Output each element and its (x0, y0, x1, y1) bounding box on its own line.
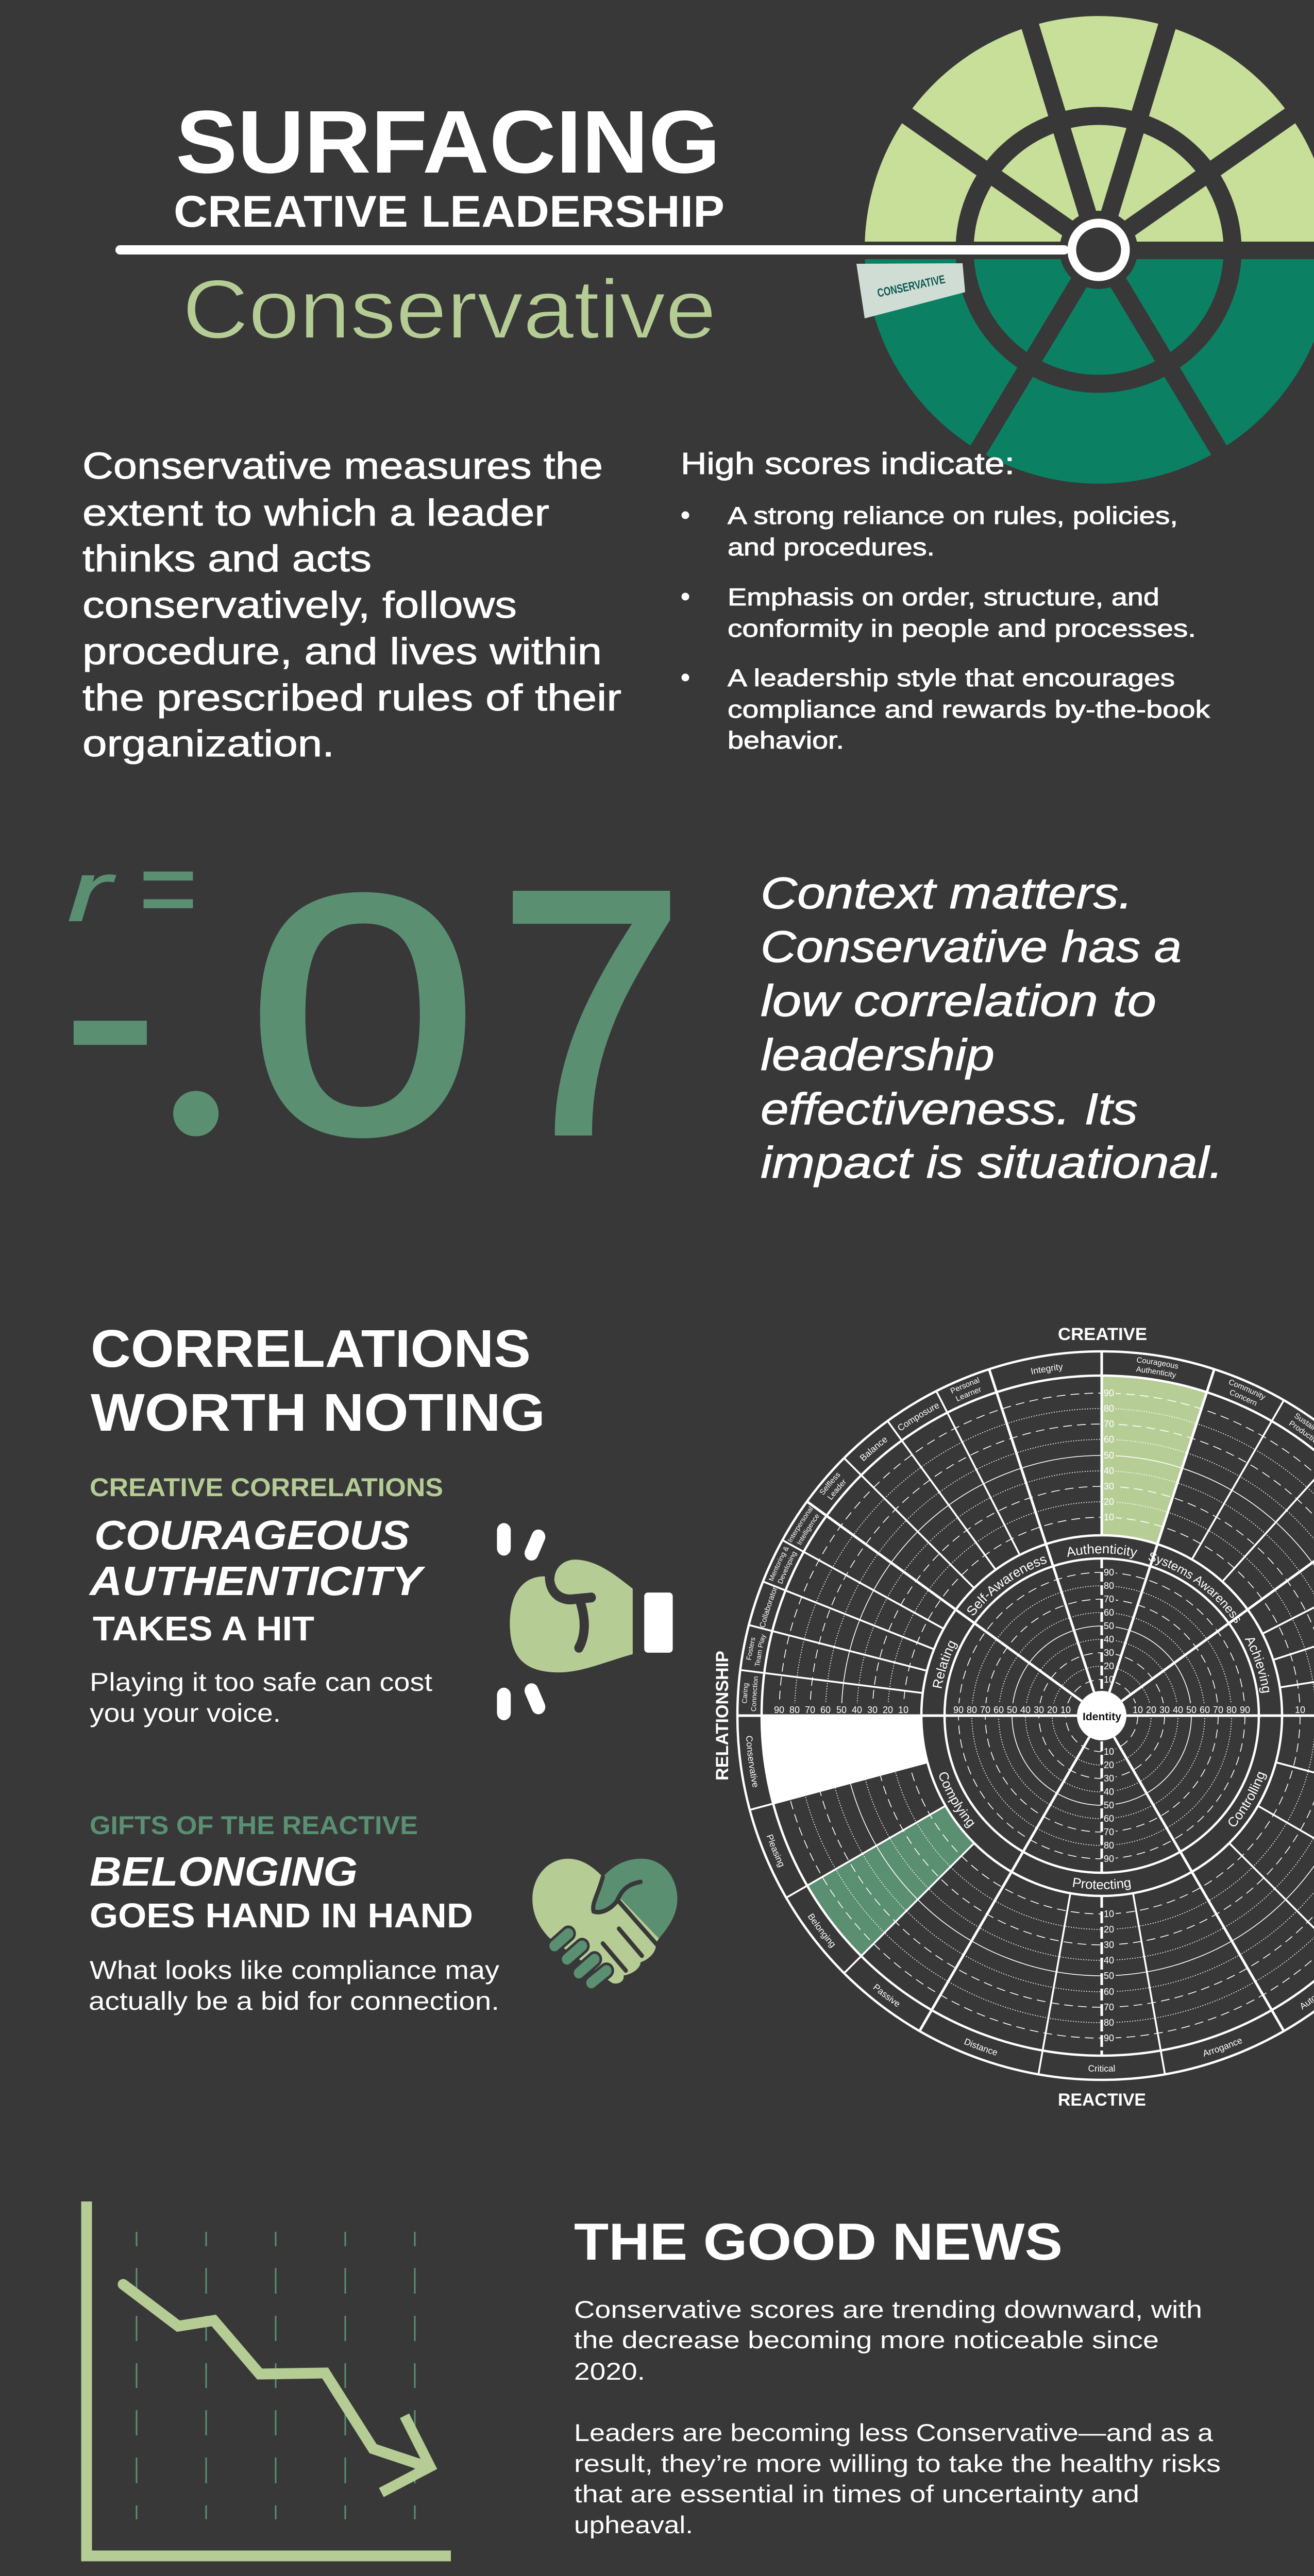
middle band labels: Self-Awareness (967, 1557, 1047, 1616)
vertical score tick labels (1104, 1388, 1114, 2043)
outer band dimension labels: Concern (1228, 1388, 1258, 1408)
horizontal score tick labels: 70 (1213, 1705, 1223, 1715)
heading: correlations worth noting: CORRELATIONS (91, 1319, 531, 1378)
big stat: r = -.07: - (60, 836, 160, 1181)
context matters statement: impact is situational. (761, 1138, 1223, 1188)
outer band dimension labels: Composure (898, 1403, 939, 1430)
subtitle: Conservative: Conservative (182, 263, 716, 356)
horizontal score tick labels: 60 (1200, 1705, 1210, 1715)
title divider line (115, 245, 1069, 255)
score rings (762, 1376, 1314, 2056)
high scores list: A leadership style that encourages (728, 664, 1175, 691)
text block: creative correlations: COURAGEOUS (94, 1512, 410, 1558)
high scores list: and procedures. (728, 533, 935, 561)
outer band dimension labels: Connection (750, 1676, 760, 1711)
horizontal score tick labels: 10 (1295, 1705, 1305, 1715)
outer band dimension labels (740, 1355, 1314, 2074)
text block: creative correlations: AUTHENTICITY (89, 1558, 426, 1604)
quadrant labels: REACTIVE (1058, 2090, 1146, 2110)
outer band dimension labels: Team Play (753, 1633, 767, 1667)
definition paragraph: procedure, and lives within (82, 631, 602, 672)
horizontal score tick labels: 80 (1226, 1705, 1237, 1715)
middle band labels: Authenticity (1067, 1544, 1138, 1559)
text block: the good news: Conservative scores are trending downward, with (574, 2296, 1202, 2323)
outer band dimension labels: Community (1227, 1378, 1267, 1402)
spokes (737, 1351, 1314, 2074)
middle band labels: Relating (933, 1640, 958, 1688)
vertical score tick labels: 80 (1104, 2018, 1114, 2028)
text block: creative correlations: you your voice. (90, 1699, 281, 1727)
outer band dimension labels: Developing (776, 1550, 798, 1585)
text block: the good news: result, they’re more willing to take the healthy risks (574, 2450, 1221, 2477)
chart: leadership circle wheel (713, 1325, 1314, 2110)
outer band dimension labels: Personal (950, 1377, 980, 1394)
hub: identity (1077, 1691, 1126, 1740)
vertical score tick labels: 80 (1104, 1840, 1114, 1851)
high scores list: behavior. (728, 726, 844, 754)
middle band labels: Systems Awareness (1149, 1553, 1240, 1623)
text block: gifts of the reactive: What looks like compliance may (90, 1956, 499, 1985)
big stat: r = -.07: . (148, 789, 244, 1214)
vertical score tick labels: 20 (1104, 1497, 1114, 1507)
text block: the good news: upheaval. (574, 2511, 693, 2538)
text block: gifts of the reactive: GOES HAND IN HAND (90, 1896, 473, 1935)
definition paragraph: the prescribed rules of their (82, 677, 621, 719)
horizontal score tick labels: 20 (1146, 1705, 1156, 1715)
outer band dimension labels: Learner (955, 1387, 981, 1401)
outer band dimension labels: Arrogance (1204, 2039, 1242, 2057)
structure rings (737, 1351, 1314, 2080)
horizontal score tick labels: 10 (1133, 1705, 1143, 1715)
text block: creative correlations (89, 1473, 443, 1727)
horizontal score tick labels: 30 (1034, 1705, 1044, 1715)
definition paragraph: organization. (82, 723, 334, 765)
horizontal score tick labels: 90 (1240, 1705, 1250, 1715)
definition paragraph: Conservative measures the (82, 446, 603, 487)
middle band labels: Protecting (1073, 1877, 1131, 1890)
heading: correlations worth noting (91, 1319, 545, 1442)
definition paragraph (82, 446, 621, 765)
title: CREATIVE LEADERSHIP (174, 187, 725, 236)
vertical score tick labels: 50 (1104, 1800, 1114, 1810)
highlighted wedge: belonging (807, 1806, 974, 1956)
horizontal score tick labels: 40 (1020, 1705, 1031, 1715)
outer band dimension labels: Integrity (1031, 1364, 1063, 1375)
high scores list: A strong reliance on rules, policies, (728, 502, 1178, 529)
context matters statement: leadership (761, 1030, 995, 1080)
middle band labels: Complying (939, 1772, 975, 1828)
vertical score tick labels: 60 (1104, 1814, 1114, 1824)
context matters statement (761, 869, 1223, 1188)
high scores list (681, 447, 1210, 754)
big stat: r = -.07 (60, 789, 683, 1214)
context matters statement: Conservative has a (761, 922, 1182, 972)
vertical score tick labels: 30 (1104, 1648, 1114, 1658)
horizontal score tick labels: 70 (980, 1705, 990, 1715)
highlighted wedge: conservative (762, 1716, 928, 1804)
outer band dimension labels: Pleasing (767, 1834, 784, 1867)
vertical score tick labels: 90 (1104, 1388, 1114, 1398)
vertical score tick labels: 40 (1104, 1634, 1114, 1645)
text block: the good news: Leaders are becoming less Conservative—and as a (574, 2419, 1214, 2446)
vertical score tick labels: 90 (1104, 1854, 1114, 1864)
vertical score tick labels: 40 (1104, 1787, 1114, 1797)
big stat: r = -.07: 0 (248, 826, 477, 1203)
big stat: r = -.07: 7 (499, 820, 683, 1206)
middle band labels (929, 1541, 1275, 1892)
quadrant labels (713, 1325, 1147, 2110)
vertical score tick labels: 10 (1104, 1747, 1114, 1757)
outer band dimension labels: Courageous (1136, 1355, 1180, 1371)
horizontal score tick labels: 20 (883, 1705, 893, 1715)
high scores list: compliance and rewards by-the-book (728, 696, 1210, 723)
text block: the good news: that are essential in times of uncertainty and (574, 2480, 1139, 2507)
horizontal score tick labels: 10 (898, 1705, 908, 1715)
outer band dimension labels: Selfless (820, 1472, 840, 1495)
vertical score tick labels: 60 (1104, 1607, 1114, 1618)
vertical score tick labels: 20 (1104, 1760, 1114, 1770)
vertical score tick labels: 70 (1104, 1419, 1114, 1429)
vertical score tick labels: 30 (1104, 1773, 1114, 1784)
horizontal score tick labels: 30 (867, 1705, 878, 1715)
icon: conservative tag on wheel (856, 263, 965, 318)
vertical score tick labels: 70 (1104, 1594, 1114, 1604)
vertical score tick labels: 70 (1104, 2002, 1114, 2012)
vertical score tick labels: 10 (1104, 1674, 1114, 1685)
vertical score tick labels: 40 (1104, 1955, 1114, 1965)
text block: creative correlations: TAKES A HIT (93, 1609, 314, 1648)
high scores list: Emphasis on order, structure, and (728, 583, 1159, 611)
vertical score tick labels: 50 (1104, 1971, 1114, 1981)
vertical score tick labels: 90 (1104, 2033, 1114, 2043)
text block: gifts of the reactive (89, 1811, 499, 2015)
quadrant labels: RELATIONSHIP (713, 1651, 732, 1781)
text block: gifts of the reactive: actually be a bid for connection. (89, 1987, 499, 2015)
outer band dimension labels: Authenticity (1136, 1365, 1177, 1380)
title (174, 92, 725, 236)
horizontal score tick labels: 50 (1007, 1705, 1017, 1715)
vertical score tick labels: 10 (1104, 1909, 1114, 1919)
icon: heart handshake (532, 1859, 677, 1984)
outer band dimension labels: Collaborator (760, 1587, 777, 1627)
high scores list: conformity in people and processes. (728, 615, 1196, 642)
definition paragraph: extent to which a leader (82, 493, 549, 534)
title: SURFACING (176, 92, 720, 192)
big stat: r = -.07: r (68, 844, 116, 939)
vertical score tick labels: 10 (1104, 1512, 1114, 1522)
icon: conservative tag on wheel: CONSERVATIVE (876, 272, 947, 300)
vertical score tick labels: 30 (1104, 1940, 1114, 1950)
middle band labels: Achieving (1245, 1638, 1270, 1693)
horizontal score tick labels: 40 (852, 1705, 862, 1715)
horizontal score tick labels: 10 (1060, 1705, 1071, 1715)
vertical score tick labels: 50 (1104, 1450, 1114, 1461)
heading: correlations worth noting: WORTH NOTING (91, 1383, 545, 1442)
vertical score tick labels: 40 (1104, 1466, 1114, 1476)
chart: downward trend (87, 2201, 451, 2556)
outer band dimension labels: Conservative (746, 1736, 757, 1787)
text block: the good news: THE GOOD NEWS (574, 2213, 1063, 2271)
text block: gifts of the reactive: BELONGING (90, 1849, 358, 1894)
outer band dimension labels: Fosters (745, 1636, 757, 1661)
vertical score tick labels: 30 (1104, 1481, 1114, 1492)
horizontal score tick labels (774, 1705, 1305, 1715)
vertical score tick labels: 20 (1104, 1924, 1114, 1935)
outer band dimension labels: Mentoring & (767, 1545, 790, 1582)
high scores list: High scores indicate: (681, 447, 1015, 481)
horizontal score tick labels: 60 (993, 1705, 1004, 1715)
vertical score tick labels: 70 (1104, 1827, 1114, 1837)
outer band dimension labels: Caring (740, 1683, 750, 1704)
icon: boxing glove (504, 1531, 673, 1713)
vertical score tick labels: 80 (1104, 1581, 1114, 1591)
text block: the good news: the decrease becoming more noticeable since (574, 2326, 1159, 2353)
vertical score tick labels: 60 (1104, 1987, 1114, 1997)
horizontal score tick labels: 80 (967, 1705, 977, 1715)
outer band dimension labels: Distance (964, 2038, 997, 2056)
context matters statement: low correlation to (761, 976, 1156, 1026)
outer band dimension labels: Intelligence (797, 1515, 819, 1545)
text block: gifts of the reactive: GIFTS OF THE REACTIVE (90, 1811, 418, 1840)
icon: header wheel logo (856, 16, 1314, 484)
context matters statement: Context matters. (761, 869, 1133, 918)
horizontal score tick labels: 60 (820, 1705, 831, 1715)
highlighted wedge: courageous authenticity (1102, 1376, 1207, 1544)
big stat: r = -.07: = (139, 827, 197, 950)
vertical score tick labels: 50 (1104, 1621, 1114, 1631)
text block: the good news (574, 2213, 1221, 2538)
text block: the good news: 2020. (574, 2358, 645, 2385)
quadrant labels: CREATIVE (1058, 1325, 1147, 1344)
text block: creative correlations: Playing it too safe can cost (90, 1668, 432, 1697)
horizontal score tick labels: 90 (774, 1705, 784, 1715)
horizontal score tick labels: 30 (1159, 1705, 1170, 1715)
outer band dimension labels: Belonging (808, 1913, 835, 1948)
horizontal score tick labels: 50 (836, 1705, 847, 1715)
outer band dimension labels: Interpersonal (787, 1506, 813, 1543)
horizontal score tick labels: 80 (789, 1705, 800, 1715)
horizontal score tick labels: 90 (953, 1705, 964, 1715)
context matters statement: effectiveness. Its (761, 1084, 1138, 1134)
text block: creative correlations: CREATIVE CORRELATIONS (90, 1473, 443, 1502)
vertical score tick labels: 20 (1104, 1661, 1114, 1671)
horizontal score tick labels: 20 (1047, 1705, 1057, 1715)
vertical score tick labels: 90 (1104, 1567, 1114, 1578)
horizontal score tick labels: 40 (1173, 1705, 1183, 1715)
outer band dimension labels: Leader (828, 1480, 846, 1500)
outer band dimension labels: Balance (860, 1437, 887, 1461)
hub: identity: Identity (1083, 1711, 1121, 1723)
horizontal score tick labels: 50 (1186, 1705, 1197, 1715)
outer band dimension labels: Passive (873, 1984, 899, 2007)
vertical score tick labels: 80 (1104, 1403, 1114, 1414)
outer band dimension labels: Critical (1088, 2065, 1115, 2072)
vertical score tick labels: 60 (1104, 1434, 1114, 1445)
definition paragraph: conservatively, follows (82, 585, 517, 626)
middle band labels: Controlling (1228, 1771, 1267, 1826)
horizontal score tick labels: 70 (805, 1705, 815, 1715)
definition paragraph: thinks and acts (82, 538, 372, 580)
